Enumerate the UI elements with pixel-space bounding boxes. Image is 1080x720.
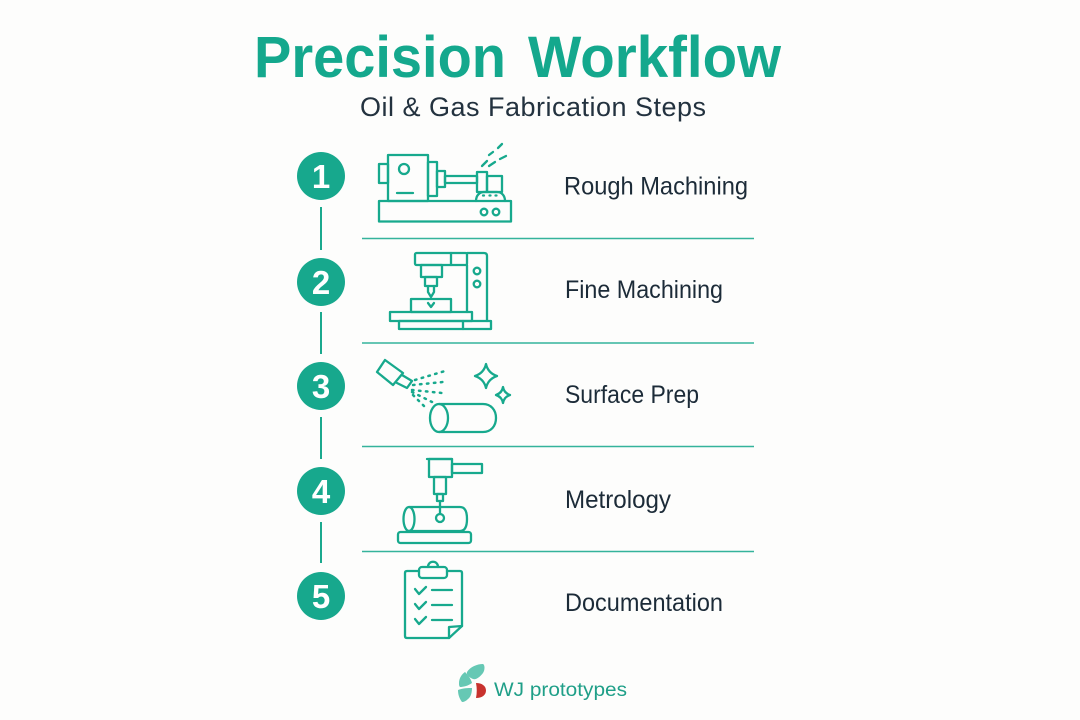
step 5 number badge (297, 572, 345, 620)
icon: lathe (379, 144, 511, 222)
logo: WJ prototypes (458, 664, 627, 702)
step 3 number badge (297, 362, 345, 410)
step 4 number badge (297, 467, 345, 515)
title (254, 25, 782, 90)
label: Surface Prep: Surface Prep (565, 381, 699, 409)
icon: spray on cylinder (377, 360, 510, 432)
step 2 number badge (297, 258, 345, 306)
label: Fine Machining: Fine Machining (565, 276, 723, 304)
step 2: fine machining (297, 253, 723, 329)
label: Documentation: Documentation (565, 589, 723, 617)
step 1 number badge: 1 (312, 158, 330, 195)
icon: measuring probe on cylinder (398, 459, 482, 543)
step 3: surface prep (297, 360, 699, 432)
step 3 number badge: 3 (312, 368, 330, 405)
label: Rough Machining: Rough Machining (564, 172, 748, 200)
step 1 number badge (297, 152, 345, 200)
step 4 number badge: 4 (312, 473, 331, 510)
title: Precision (254, 25, 506, 90)
logo mark (458, 664, 486, 702)
brand name: WJ prototypes (494, 680, 627, 701)
step 4: metrology (297, 459, 671, 543)
subtitle: Oil & Gas Fabrication Steps (360, 92, 706, 122)
step 2 number badge: 2 (312, 264, 330, 301)
step 5 number badge: 5 (312, 578, 330, 615)
step 1: rough machining (297, 144, 748, 222)
title: Workflow (528, 25, 782, 90)
icon: checklist clipboard (405, 562, 462, 638)
label: Metrology: Metrology (565, 486, 671, 514)
icon: milling machine (390, 253, 491, 329)
step 5: documentation (297, 562, 723, 638)
